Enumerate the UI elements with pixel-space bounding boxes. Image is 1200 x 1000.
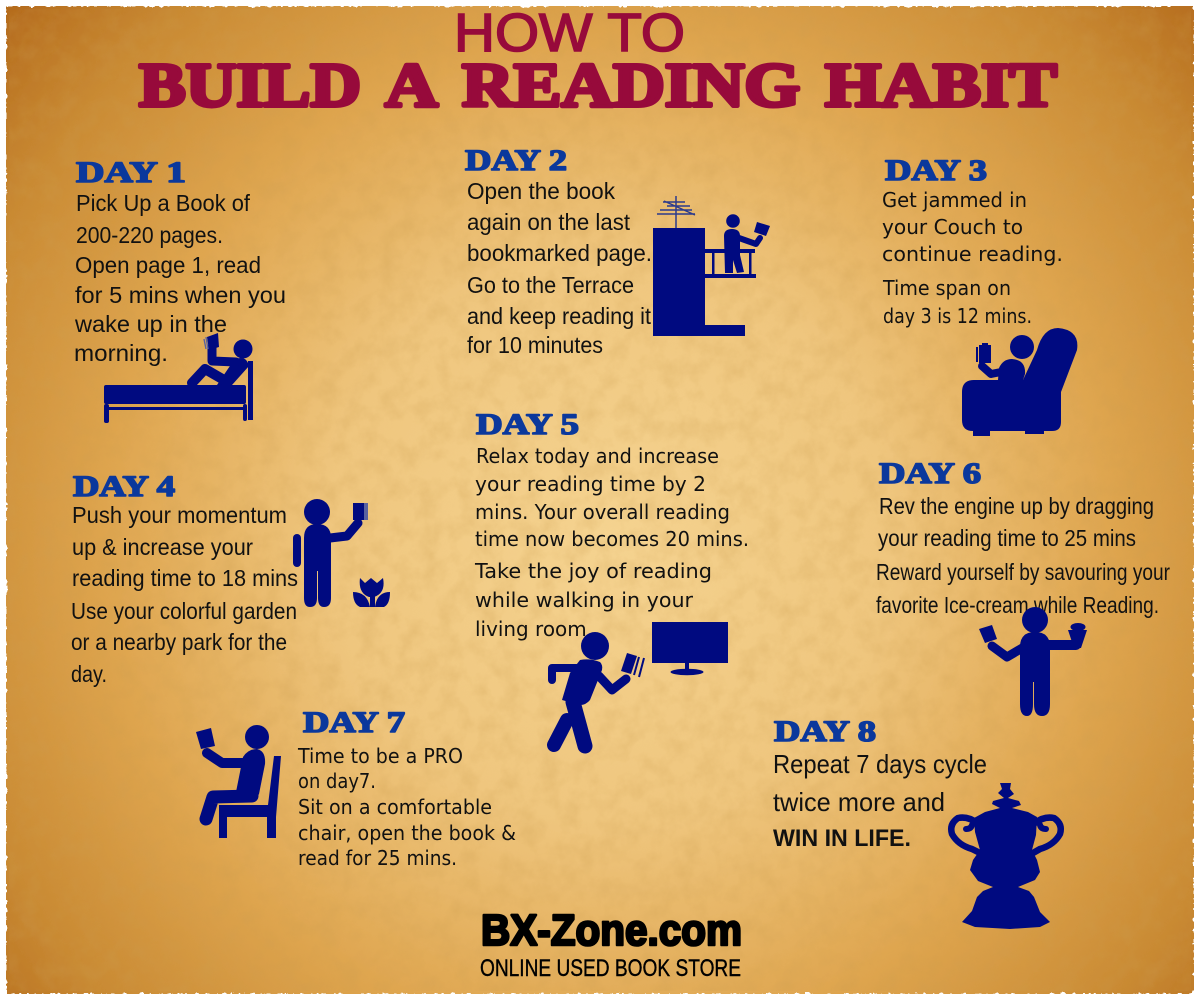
icon: person reading on chair bbox=[196, 725, 281, 838]
heading: day 6: DAY 6 bbox=[879, 457, 981, 490]
panel: day 3 bbox=[882, 154, 1077, 436]
icon: person reading on terrace bbox=[653, 196, 770, 336]
text: day 7 instructions: on day7. bbox=[298, 769, 376, 793]
title line: build a reading habit: BUILD bbox=[139, 52, 361, 120]
text: day 8 instructions bbox=[773, 749, 987, 852]
text: day 7 instructions bbox=[297, 744, 516, 870]
text: day 5 instructions: living room. bbox=[475, 617, 593, 641]
text: day 7 instructions: Sit on a comfortable bbox=[298, 795, 492, 819]
text: day 4 instructions: reading time to 18 mins bbox=[72, 565, 298, 591]
text: day 1 instructions: Pick Up a Book of bbox=[76, 190, 251, 216]
text: day 7 instructions: chair, open the book & bbox=[298, 821, 516, 845]
text: day 5 instructions: your reading time by 2 bbox=[475, 472, 706, 496]
footer: store branding bbox=[480, 906, 742, 982]
text: day 4 instructions bbox=[71, 502, 298, 687]
heading: day 2: DAY 2 bbox=[465, 144, 567, 177]
title line: build a reading habit: READING bbox=[462, 52, 800, 120]
text: day 1 instructions: morning. bbox=[74, 340, 168, 366]
panel: day 7 bbox=[196, 706, 516, 870]
icon: person reading in garden bbox=[293, 499, 390, 607]
panel: day 1 bbox=[74, 156, 286, 423]
text: day 8 instructions: twice more and bbox=[773, 787, 945, 817]
text: day 5 instructions: time now becomes 20 mins. bbox=[475, 527, 749, 551]
heading: day 1: DAY 1 bbox=[76, 156, 186, 189]
text: day 6 instructions: Rev the engine up by dragging bbox=[879, 493, 1154, 519]
text: day 2 instructions bbox=[467, 178, 652, 358]
icon: trophy cup bbox=[951, 783, 1061, 929]
text: day 2 instructions: Open the book bbox=[467, 178, 615, 204]
heading: day 5: DAY 5 bbox=[476, 408, 579, 441]
text: day 4 instructions: day. bbox=[71, 661, 107, 687]
icon: television bbox=[652, 622, 728, 675]
title line: build a reading habit: HABIT bbox=[825, 52, 1057, 120]
heading: day 7: DAY 7 bbox=[303, 706, 405, 739]
text: day 2 instructions: Go to the Terrace bbox=[467, 272, 634, 298]
text: day 1 instructions: for 5 mins when you bbox=[75, 282, 286, 308]
panel: day 8 bbox=[773, 715, 1061, 929]
brand name: BX-Zone.com bbox=[481, 906, 742, 955]
text: day 2 instructions: and keep reading it bbox=[467, 303, 652, 329]
icon: person with book and ice-cream bbox=[979, 607, 1087, 716]
text: day 3 instructions: day 3 is 12 mins. bbox=[883, 304, 1032, 328]
text: day 4 instructions: Use your colorful garden bbox=[71, 598, 297, 624]
text: day 1 instructions bbox=[74, 190, 286, 366]
text: day 1 instructions: wake up in the bbox=[74, 311, 227, 337]
heading: day 3: DAY 3 bbox=[885, 154, 987, 187]
icon: person reading in bed bbox=[104, 333, 253, 423]
text: day 3 instructions: continue reading. bbox=[882, 242, 1063, 266]
title bbox=[139, 3, 1057, 120]
text: day 2 instructions: for 10 minutes bbox=[467, 332, 603, 358]
tagline: ONLINE USED BOOK STORE bbox=[480, 955, 741, 982]
icon: person reading in armchair bbox=[962, 328, 1077, 436]
text: day 5 instructions: mins. Your overall reading bbox=[475, 500, 730, 524]
text: day 7 instructions: Time to be a PRO bbox=[297, 744, 463, 768]
heading: day 8: DAY 8 bbox=[774, 715, 876, 748]
title line: build a reading habit bbox=[139, 52, 1057, 120]
panel: day 6 bbox=[876, 457, 1170, 716]
text: day 6 instructions bbox=[876, 493, 1170, 618]
text: day 5 instructions bbox=[474, 444, 749, 641]
heading: day 4: DAY 4 bbox=[73, 470, 175, 503]
title line: build a reading habit: A bbox=[385, 52, 438, 120]
text: day 8 instructions: Repeat 7 days cycle bbox=[773, 749, 987, 779]
text: day 2 instructions: bookmarked page. bbox=[467, 240, 652, 266]
text: day 3 instructions bbox=[882, 188, 1063, 328]
text: day 1 instructions: 200-220 pages. bbox=[76, 222, 223, 248]
text: day 4 instructions: up & increase your bbox=[72, 534, 253, 560]
icon: person walking while reading bbox=[552, 622, 728, 746]
text: day 5 instructions: Take the joy of reading bbox=[474, 559, 712, 583]
text: day 3 instructions: Get jammed in bbox=[882, 188, 1027, 212]
text: day 3 instructions: your Couch to bbox=[882, 215, 1023, 239]
panel: day 2 bbox=[465, 144, 770, 358]
panel: day 5 bbox=[474, 408, 749, 746]
text: day 4 instructions: or a nearby park for the bbox=[71, 629, 287, 655]
panel: day 4 bbox=[71, 470, 390, 687]
text: day 7 instructions: read for 25 mins. bbox=[298, 846, 457, 870]
text: day 6 instructions: your reading time to 25 mins bbox=[878, 525, 1136, 551]
text: day 1 instructions: Open page 1, read bbox=[75, 252, 261, 278]
text: day 5 instructions: while walking in your bbox=[475, 588, 694, 612]
text: day 3 instructions: Time span on bbox=[882, 276, 1011, 300]
text: day 2 instructions: again on the last bbox=[467, 209, 631, 235]
text: day 4 instructions: Push your momentum bbox=[72, 502, 287, 528]
text: day 5 instructions: Relax today and increase bbox=[476, 444, 719, 468]
text: day 8 instructions: WIN IN LIFE. bbox=[773, 825, 911, 852]
title line: how to: HOW TO bbox=[454, 3, 685, 63]
